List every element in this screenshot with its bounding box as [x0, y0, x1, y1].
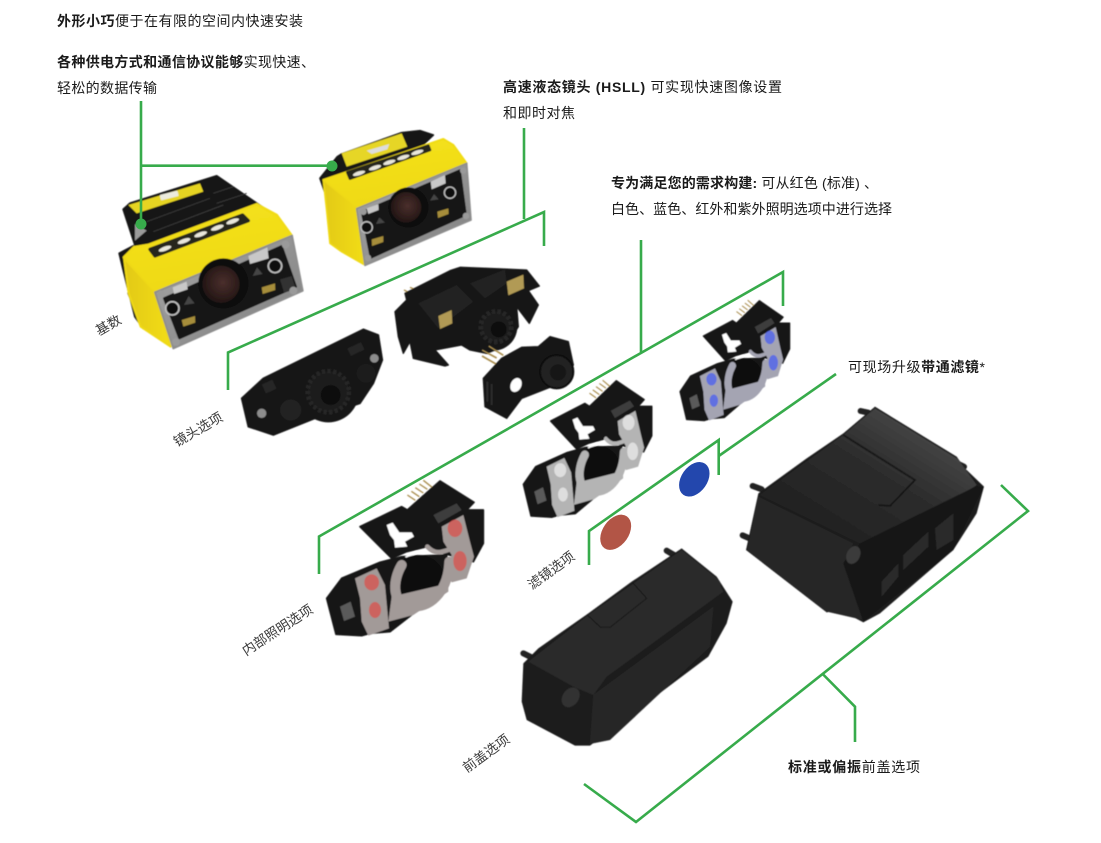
- camera: large base unit: [119, 176, 303, 348]
- heading: field-upgradable bandpass filter: 可现场升级带通滤镜*: [848, 359, 986, 375]
- camera: second base unit: [320, 131, 471, 265]
- heading: front cover options: 标准或偏振前盖选项: [788, 759, 920, 775]
- heading: HSLL lens: 高速液态镜头 (HSLL) 可实现快速图像设置: [503, 79, 782, 95]
- label: filter options: 滤镜选项: [525, 549, 577, 592]
- front cover: small standard: [522, 548, 733, 746]
- lens option: liquid lens module: [395, 267, 539, 366]
- heading: compact size: 外形小巧便于在有限的空间内快速安装: [57, 13, 303, 29]
- filter: red disc: [594, 509, 638, 556]
- label: front cover options: 前盖选项: [459, 731, 512, 775]
- label: lens options: 镜头选项: [171, 410, 225, 450]
- callout bracket: lens options: [228, 128, 544, 390]
- heading: power and communication: 各种供电方式和通信协议能够实现快速、: [57, 54, 315, 70]
- label: internal lighting options: 内部照明选项: [239, 602, 316, 659]
- callout bracket: front cover options: [584, 485, 1028, 822]
- lighting option: red module: [327, 480, 483, 636]
- callout bracket: filter options: [589, 374, 836, 565]
- callout lines: compact size and communication: [136, 101, 338, 230]
- lighting option: white module: [523, 380, 652, 517]
- lighting option: blue module: [680, 300, 790, 421]
- lens option: small lens module: [482, 337, 573, 418]
- text: lighting colors: 白色、蓝色、红外和紫外照明选项中进行选择: [611, 201, 892, 217]
- heading: built to your needs: 专为满足您的需求构建: 可从红色 (标准) 、: [611, 175, 878, 191]
- text: HSLL second line: 和即时对焦: [503, 105, 575, 121]
- lens option: autofocus module: [242, 329, 382, 435]
- front cover: large polarized: [743, 407, 984, 622]
- text: power and communication second line: 轻松的数据传输: [57, 80, 157, 96]
- filter: blue disc: [673, 456, 716, 502]
- label: base: 基数: [92, 311, 124, 339]
- callout bracket: lighting options: [319, 240, 783, 574]
